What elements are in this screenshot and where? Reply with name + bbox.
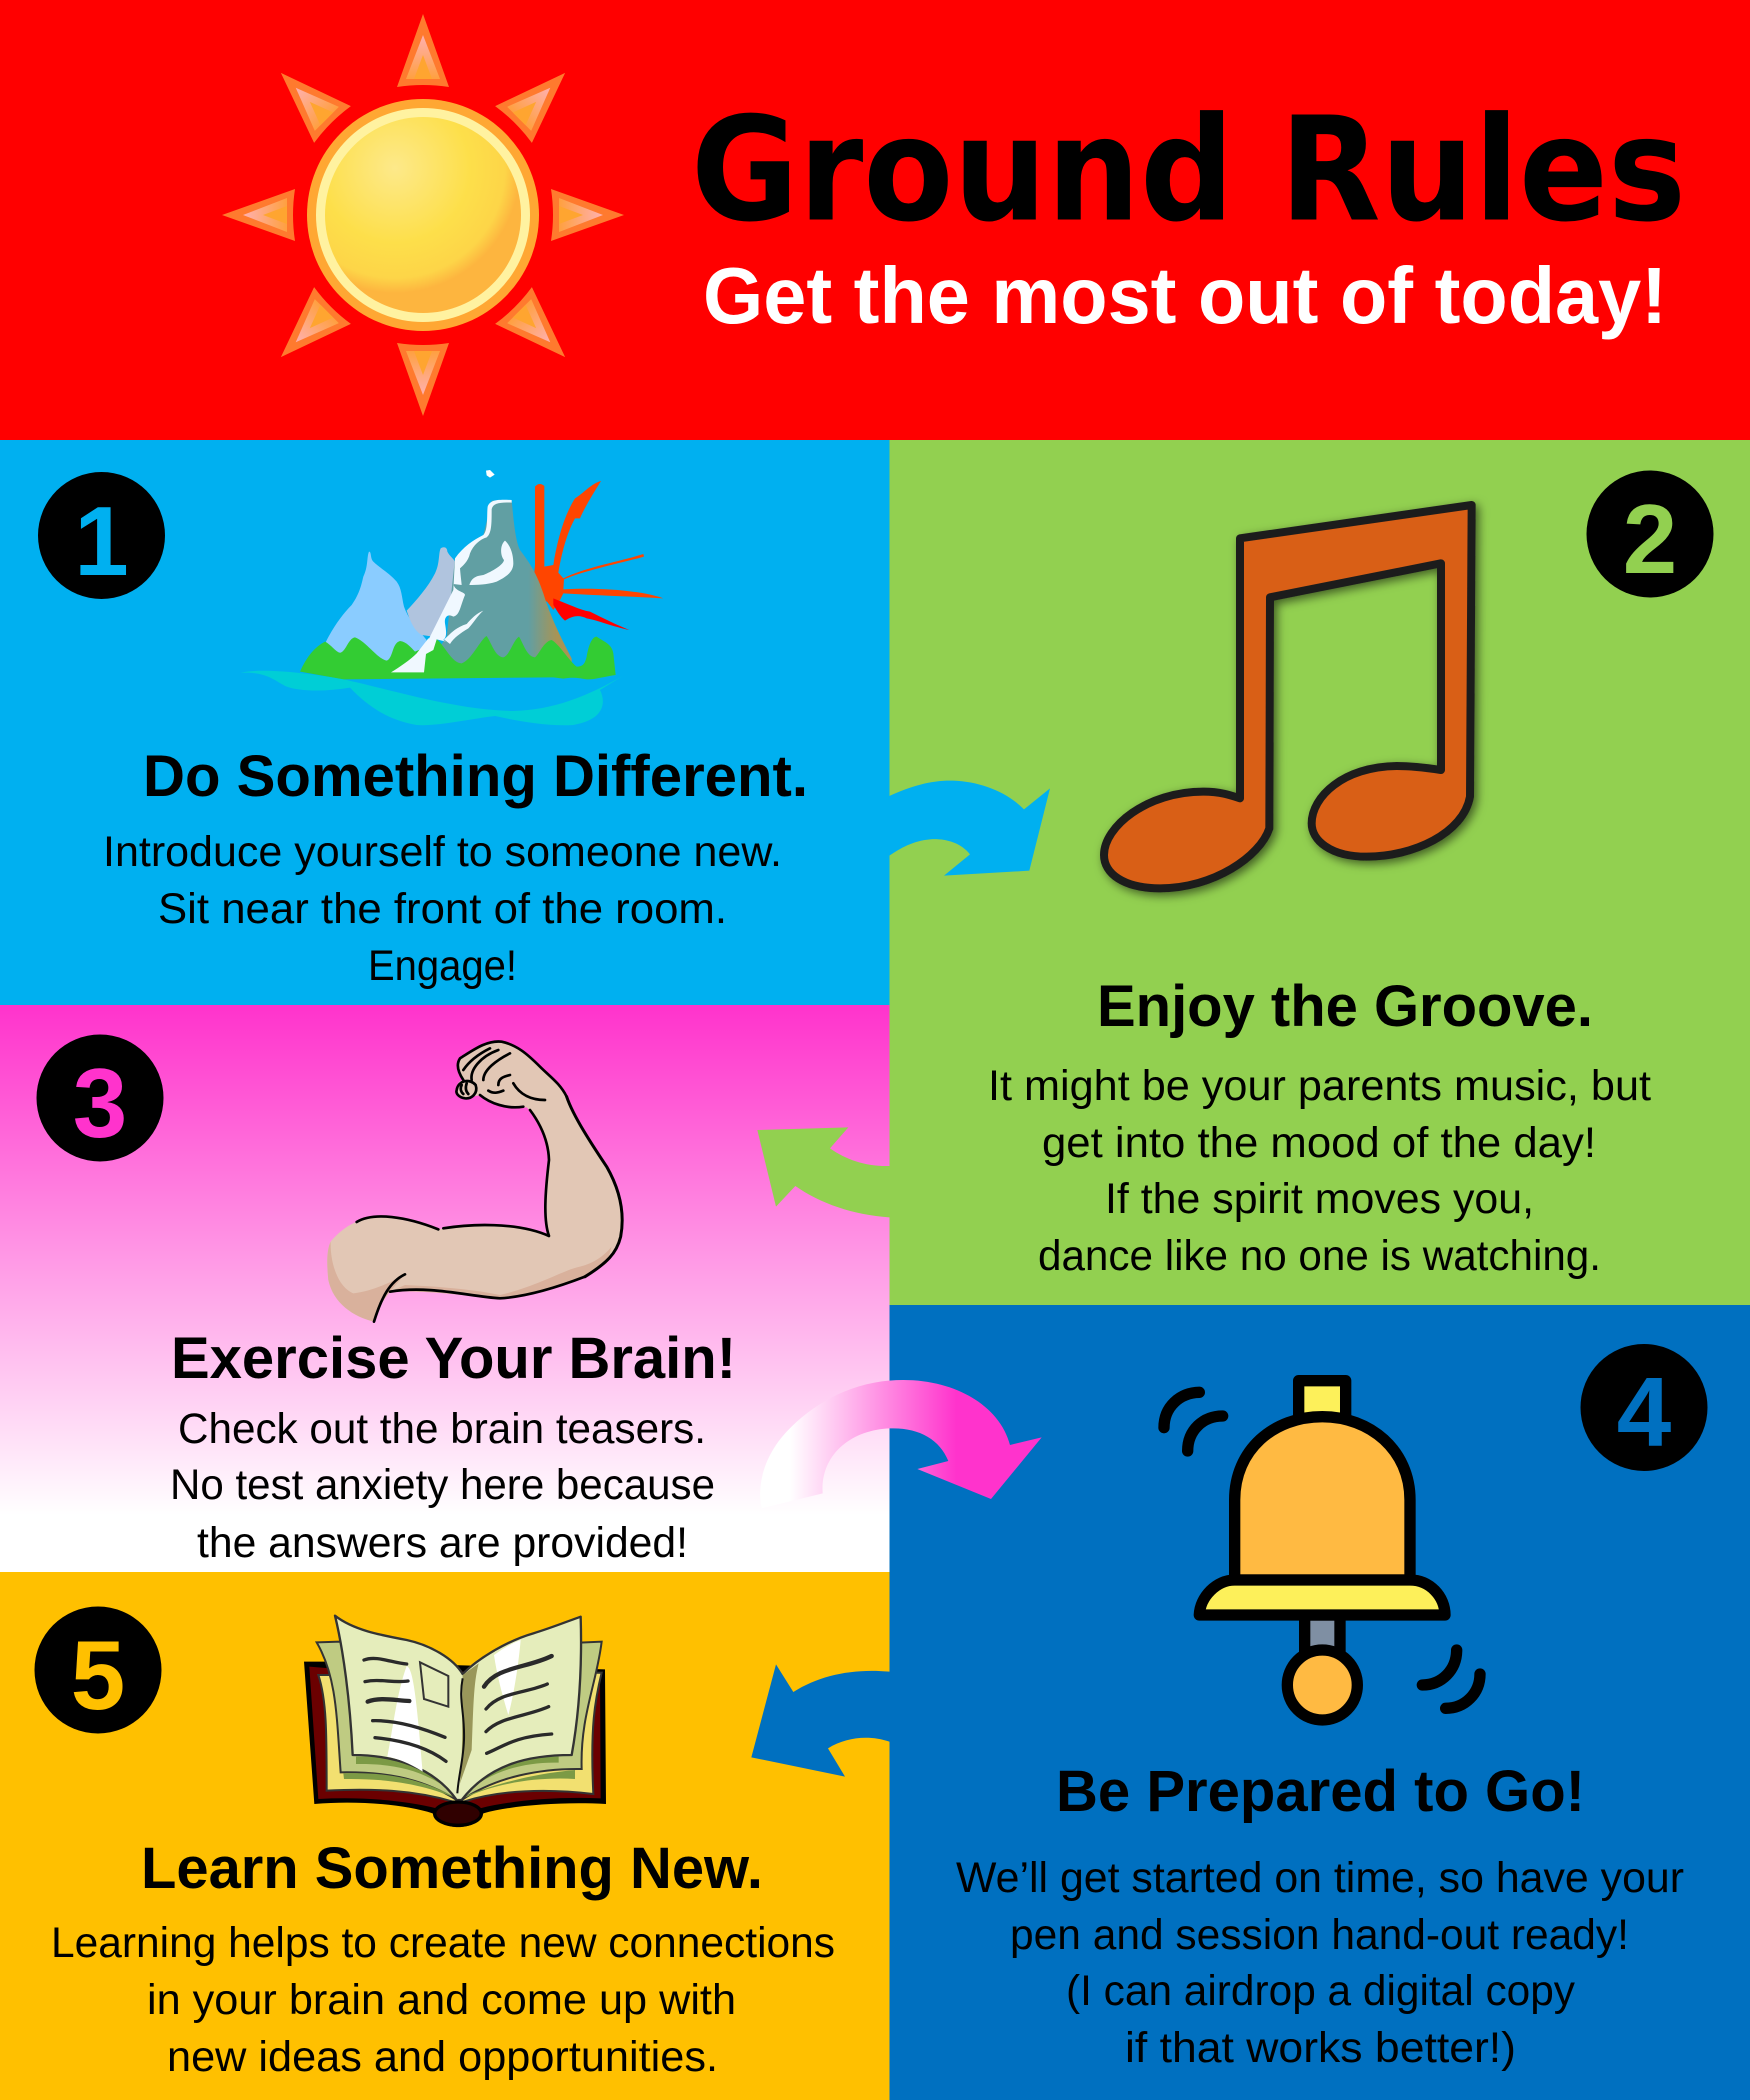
number badge 2	[1586, 470, 1714, 598]
number badge 4	[1580, 1344, 1708, 1471]
heading: Be Prepared to Go!	[1056, 1759, 1585, 1824]
icon: flexed arm	[327, 1041, 622, 1322]
number badge 1: 1	[74, 486, 129, 596]
body text: the answers are provided!	[197, 1519, 688, 1567]
body text: dance like no one is watching.	[1038, 1232, 1601, 1280]
panel: 3 exercise your brain	[0, 1005, 890, 1572]
body text: No test anxiety here because	[170, 1461, 715, 1509]
body text: If the spirit moves you,	[1105, 1175, 1534, 1223]
icon: open book	[304, 1616, 606, 1827]
number badge 1	[38, 472, 165, 599]
panel: 4 be prepared to go	[890, 1305, 1750, 2100]
number badge 4: 4	[1617, 1357, 1671, 1467]
body text	[956, 1854, 1684, 2072]
panel: 1 do something different	[0, 440, 890, 1005]
body text: Engage!	[368, 942, 517, 990]
body text: new ideas and opportunities.	[167, 2033, 718, 2081]
number badge 3	[36, 1034, 164, 1162]
subtitle: Get the most out of today!	[703, 251, 1667, 340]
body text: if that works better!)	[1125, 2024, 1516, 2072]
panel: 5 learn something new	[0, 1572, 890, 2100]
body text: Introduce yourself to someone new.	[103, 828, 782, 876]
heading: Exercise Your Brain!	[171, 1326, 736, 1391]
icon: mountain island with sun	[241, 470, 663, 725]
panel: 2 enjoy the groove	[890, 440, 1750, 1305]
icon: ringing bell	[1164, 1381, 1480, 1720]
number badge 2: 2	[1623, 484, 1677, 594]
panel: header	[0, 0, 1750, 441]
body text: It might be your parents music, but	[988, 1062, 1651, 1110]
body text	[170, 1405, 715, 1567]
heading: Enjoy the Groove.	[1097, 974, 1593, 1039]
number badge 5	[34, 1606, 162, 1734]
body text: Check out the brain teasers.	[178, 1405, 706, 1453]
arrow: 1 to 2	[887, 781, 1050, 876]
arrow: 4 to 5	[751, 1664, 892, 1777]
body text: Sit near the front of the room.	[158, 885, 727, 933]
body text	[103, 828, 782, 990]
arrow: 3 to 4	[760, 1380, 1042, 1508]
body text	[51, 1919, 835, 2081]
icon: sun	[222, 14, 624, 416]
number badge 3: 3	[73, 1048, 127, 1158]
arrow: 2 to 3	[757, 1127, 892, 1217]
body text: Learning helps to create new connections	[51, 1919, 835, 1967]
body text: in your brain and come up with	[147, 1976, 736, 2024]
icon: music notes	[1104, 505, 1472, 888]
body text	[988, 1062, 1651, 1280]
body text: get into the mood of the day!	[1042, 1119, 1596, 1167]
heading: Do Something Different.	[143, 744, 808, 809]
number badge 5: 5	[71, 1620, 125, 1730]
body text: pen and session hand-out ready!	[1010, 1911, 1629, 1959]
body text: We’ll get started on time, so have your	[956, 1854, 1684, 1902]
body text: (I can airdrop a digital copy	[1066, 1967, 1575, 2015]
heading: Learn Something New.	[141, 1836, 763, 1901]
